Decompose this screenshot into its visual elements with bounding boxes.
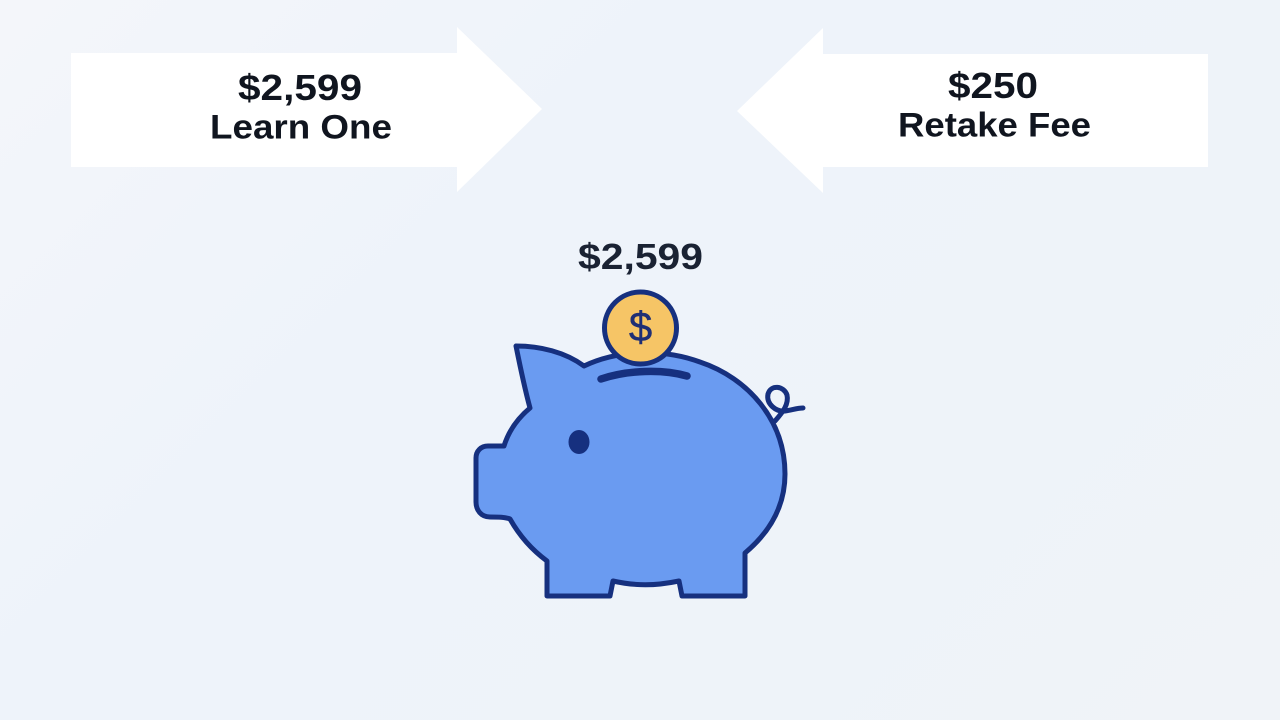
arrow: Learn One cost xyxy=(71,27,542,192)
arrow: Retake Fee cost xyxy=(737,28,1208,193)
label: $250 Retake Fee: $250 xyxy=(948,65,1038,106)
label: $2,599 Learn One xyxy=(210,67,392,146)
pig eye xyxy=(568,430,590,454)
pig body xyxy=(476,346,785,596)
label: $250 Retake Fee: Retake Fee xyxy=(898,106,1091,144)
icon: coin xyxy=(604,292,676,364)
coin slot xyxy=(601,371,687,379)
label: $2,599 Learn One: $2,599 xyxy=(238,67,362,108)
icon: piggy bank xyxy=(476,292,803,596)
icon: coin: $ xyxy=(629,303,652,350)
label: $250 Retake Fee xyxy=(898,65,1091,144)
pig tail xyxy=(768,387,803,421)
savings amount: $2,599 xyxy=(578,236,703,277)
label: $2,599 Learn One: Learn One xyxy=(210,108,392,146)
